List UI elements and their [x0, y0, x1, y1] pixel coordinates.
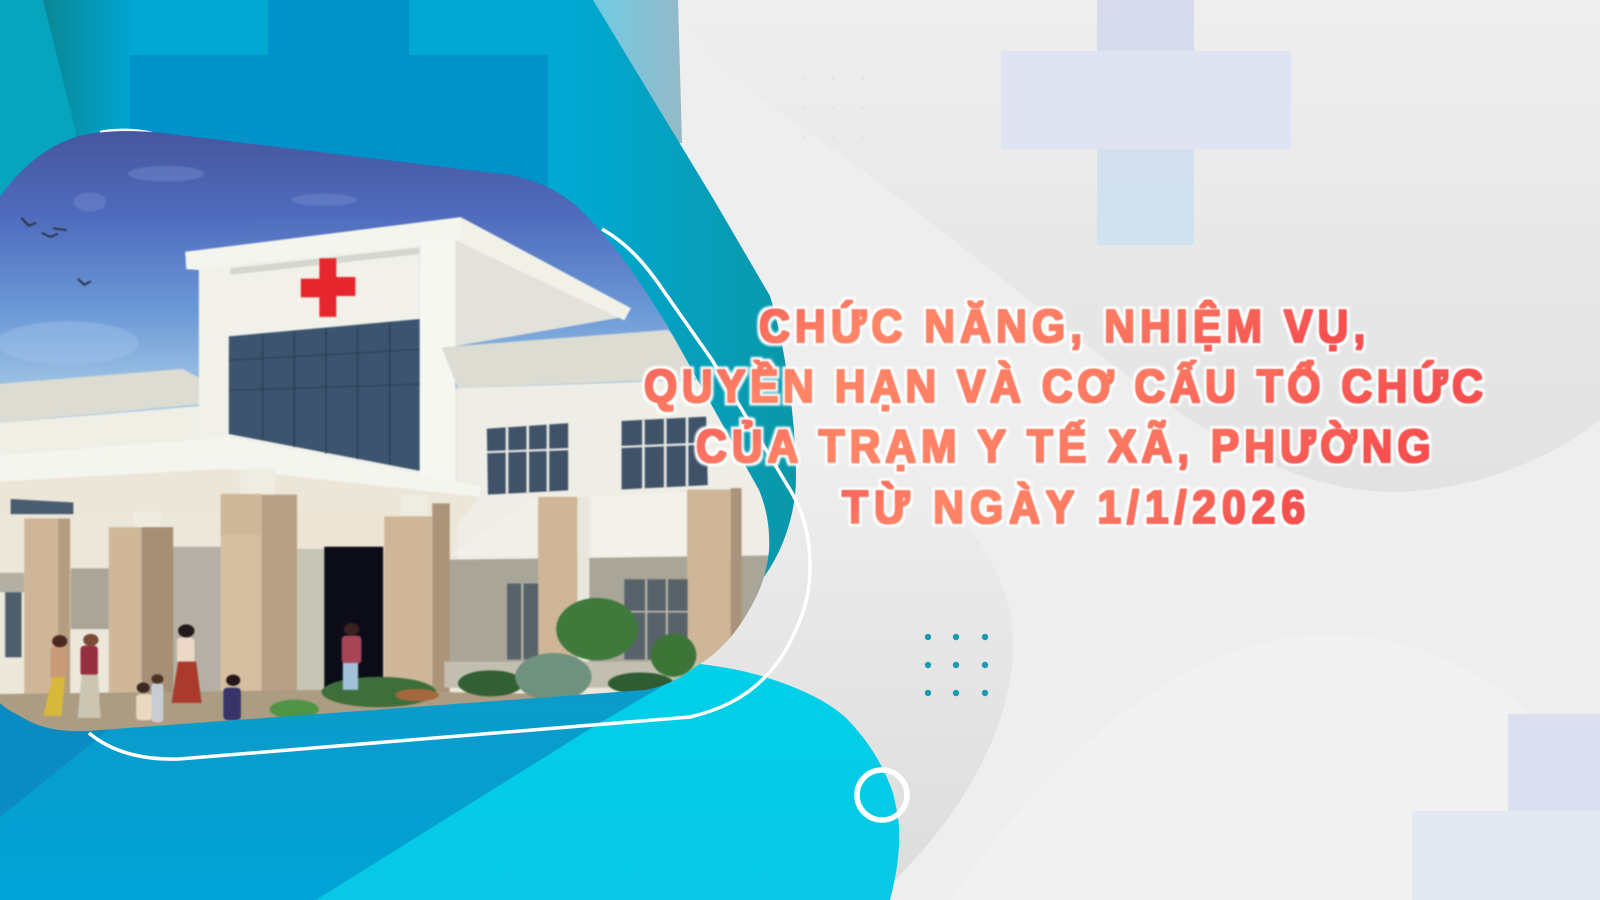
- red cross: [301, 258, 355, 317]
- sky: [0, 131, 698, 424]
- tower top fascia: [185, 217, 461, 270]
- glass facade: [229, 319, 420, 471]
- title: QUYỀN HẠN VÀ CƠ CẤU TỔ CHỨC: [644, 360, 1483, 412]
- tower fascia shadow: [230, 247, 420, 275]
- background shape: lower grey blob: [600, 400, 1013, 900]
- title: CỦA TRẠM Y TẾ XÃ, PHƯỜNG: [696, 420, 1431, 472]
- icon: large plus, top right: [1001, 0, 1291, 245]
- background shape: upper grey blob: [670, 0, 1600, 492]
- white outline curve: [89, 229, 810, 759]
- building base wall: [0, 388, 624, 696]
- ground: [0, 689, 588, 732]
- cyan blob: [316, 664, 899, 900]
- wall panel right: [592, 492, 687, 555]
- small left windows: [11, 499, 73, 514]
- canopy side wall: [452, 551, 458, 555]
- side wall of tower: [454, 239, 624, 346]
- lower walls: [447, 555, 777, 668]
- icon: plus in blue panel: [130, 0, 548, 255]
- entrance door: [324, 547, 383, 692]
- title: CHỨC NĂNG, NHIỆM VỤ,: [759, 301, 1365, 352]
- background shape: bottom right blob: [950, 635, 1600, 900]
- shrubs: [270, 598, 696, 719]
- white sliver at photo top: [100, 130, 152, 133]
- tan pillars: [24, 488, 742, 718]
- birds: [22, 218, 91, 285]
- faint dot grid: [802, 76, 864, 140]
- decorative dot grid: [925, 634, 988, 696]
- lower blue band: [0, 640, 880, 900]
- white ring: [857, 770, 907, 820]
- tower right column: [420, 238, 455, 482]
- column capitals: [134, 469, 427, 517]
- canopy underside: [198, 468, 479, 522]
- icon: plus, bottom right: [1412, 714, 1600, 900]
- people: [43, 623, 361, 722]
- clouds: [0, 166, 357, 365]
- lower windows: [507, 579, 688, 659]
- tower fascia side: [454, 217, 631, 320]
- upper windows: [487, 417, 708, 495]
- photo: health station building: [0, 131, 770, 732]
- left roof: [0, 369, 204, 423]
- low grey plinth: [444, 661, 704, 688]
- title: TỪ NGÀY 1/1/2026: [842, 482, 1305, 533]
- title: [644, 301, 1483, 533]
- blue panel: [0, 0, 796, 700]
- left wing wall: [0, 407, 198, 455]
- tower face: [199, 243, 420, 477]
- right wing wall: [458, 378, 777, 560]
- right roof: [442, 330, 717, 388]
- canopy: [0, 437, 480, 498]
- dark blue corner: [0, 690, 120, 817]
